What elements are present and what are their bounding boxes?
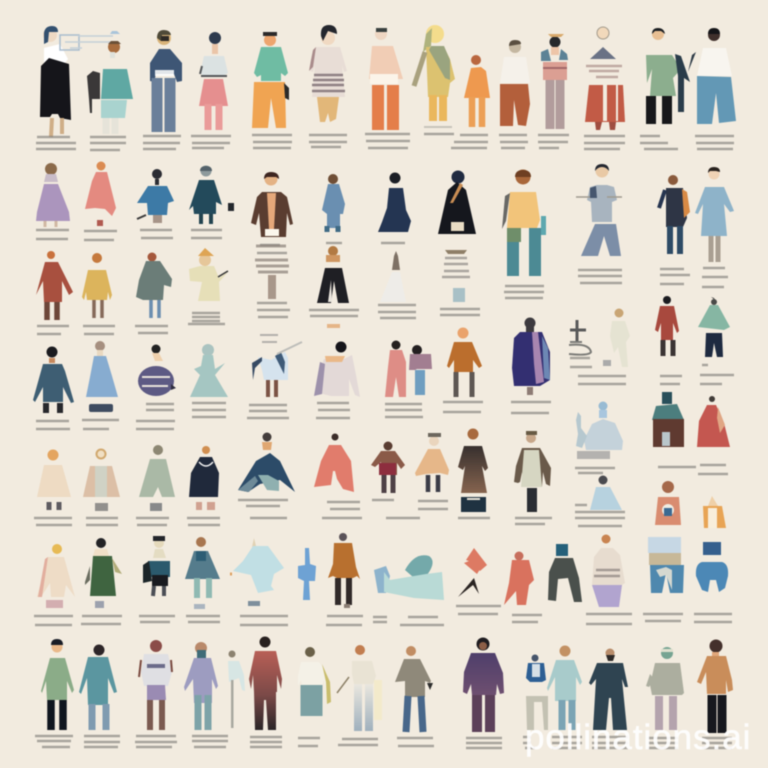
figure: teal tunic <box>79 644 120 747</box>
figure: cream tunic with grey trousers <box>337 645 382 745</box>
ghost sketch lines between figures <box>60 31 120 50</box>
figure: sage cloak <box>135 252 172 333</box>
figure: sage tunic <box>136 445 175 525</box>
figure: brown small figure <box>371 442 420 518</box>
row 4 of figures <box>33 296 734 429</box>
figure: orange and yellow striped <box>703 496 726 528</box>
figure: pale teal silhouette <box>190 344 228 417</box>
figure: dark teal backpack figure <box>139 536 175 622</box>
figure: red skirt with stripes <box>584 27 625 149</box>
figure: black flared trousers <box>309 246 359 328</box>
figure: peach top and orange trousers <box>365 28 410 148</box>
figure: sword and pale figure <box>228 650 245 728</box>
figure: pale white robe <box>610 308 630 367</box>
row 7 of figures <box>35 636 733 748</box>
figure: red dress <box>697 396 730 474</box>
figure: tan block over blue <box>643 537 684 621</box>
figure: teal cloak <box>185 537 220 622</box>
figure: dark jacket with orange sleeve <box>659 175 690 284</box>
figure: pale hooded robe <box>34 544 75 625</box>
figure: pale robe with sword <box>188 248 228 324</box>
figure: pink outfit <box>385 340 406 397</box>
figure: striped top and purple trousers <box>586 534 632 624</box>
figure: green cape with navy trousers <box>698 297 734 384</box>
figure: black cloak with white collar <box>187 446 220 525</box>
figure: orange sweater and black trousers <box>697 640 733 748</box>
figure: teal swoosh <box>384 555 444 625</box>
figure: pale blue scrubs <box>547 646 582 748</box>
figure: small navy figure on table <box>523 654 548 748</box>
figure: grey-blue flared trousers <box>576 164 622 283</box>
figure: coral hood <box>504 552 542 622</box>
row 5 of figures <box>34 392 730 525</box>
figure: blue long coat <box>322 174 345 243</box>
row 2 of figures <box>36 162 734 298</box>
figure: pale blue flowing robe <box>230 538 288 625</box>
figure: blue jacket and ponytail <box>137 169 174 238</box>
figure: navy sweater and slate trousers <box>143 30 182 149</box>
figure: white apron with teal trousers <box>298 647 331 746</box>
figure: peach tunic with hat <box>415 433 449 509</box>
figure: hat, pink stripes and mauve trousers <box>538 34 569 148</box>
figure: red top and dark trousers <box>655 296 682 384</box>
figure: yellow apron and teal trousers <box>502 170 546 298</box>
figure: dark teal coat <box>189 166 234 238</box>
figure: purple striped round body <box>136 344 176 429</box>
figure: black triangle gown <box>438 170 476 254</box>
watermark: pollinations.ai <box>525 718 751 757</box>
figure: yellow hood and green shawl <box>414 25 455 134</box>
figure: cream apron with brown sleeves <box>514 431 552 524</box>
figure: rust coat <box>36 251 73 334</box>
row 5b of figures, right side <box>575 476 726 528</box>
figure: mauve top and blue trousers <box>385 345 432 417</box>
figure: brown open coat <box>251 172 293 253</box>
row 3 of figures <box>36 246 480 334</box>
figure: brown with white circle <box>655 481 681 525</box>
figure: blue icon <box>373 566 390 622</box>
figure: orange tunic <box>326 533 363 625</box>
figure: coral cape <box>314 434 362 518</box>
figure: pale cape <box>314 342 360 418</box>
figure: dark teal suit with beard <box>589 648 628 748</box>
figure: purple suit with afro <box>463 638 504 748</box>
figure: grey sweater and mauve trousers <box>646 647 684 748</box>
figure: blue apron dress <box>695 167 734 287</box>
figure: blue cross figure <box>298 548 316 600</box>
row 6 of figures <box>34 533 732 625</box>
figure: tan coat <box>83 448 120 525</box>
figure: white top and blue trousers <box>688 28 736 149</box>
figure: purple cape <box>36 163 70 239</box>
figure: taupe sweater with blue trousers <box>395 646 434 746</box>
figure: navy coat and dark arms <box>33 346 74 429</box>
figure: orange sweater <box>443 328 483 412</box>
cross and equipment sketch <box>569 320 626 384</box>
figure: seated navy shawl <box>238 432 295 518</box>
figure: T-shaped stripes <box>255 246 290 317</box>
figure: cream sweater <box>34 450 72 525</box>
figure: stripes and icon <box>440 258 480 315</box>
figure: green sweater and black trousers <box>35 639 74 747</box>
figure: mustard coat <box>82 253 115 334</box>
figure: mint top and orange trousers <box>252 33 292 148</box>
figure: coral dress <box>84 162 117 240</box>
figure: pale ghost with statue <box>575 402 623 473</box>
figure: green top with black trousers <box>640 28 690 149</box>
figure: dark grey with blue head <box>548 544 582 602</box>
figure: red kite <box>456 548 501 614</box>
figure: small orange outfit <box>451 55 490 148</box>
figure: white top and rust trousers <box>499 40 530 148</box>
figure: dark to brown robe <box>458 428 490 518</box>
figure: person aiming long tool <box>247 335 302 418</box>
figure: navy gown <box>378 172 411 243</box>
figure: pink skirt <box>191 32 231 148</box>
figure: red to black tall <box>249 636 282 747</box>
figure: maroon hair with white and purple top <box>135 640 177 747</box>
figure: green dress <box>81 538 122 624</box>
figure: teal dress with backpack <box>87 41 133 150</box>
figure: black outfit with white scarf <box>36 26 76 149</box>
row 1 of figures <box>36 25 736 150</box>
figure: navy cape with lilac stripe <box>511 318 551 413</box>
figure: light blue robe <box>82 341 119 429</box>
figure: blue body with bar head <box>694 542 732 622</box>
figure: pale blue ghost <box>575 476 625 526</box>
figure: lavender coat <box>184 642 228 747</box>
figure: teal and dark house figure <box>652 392 696 467</box>
figure: striped dress <box>309 25 347 147</box>
figure: white cone <box>378 251 416 318</box>
